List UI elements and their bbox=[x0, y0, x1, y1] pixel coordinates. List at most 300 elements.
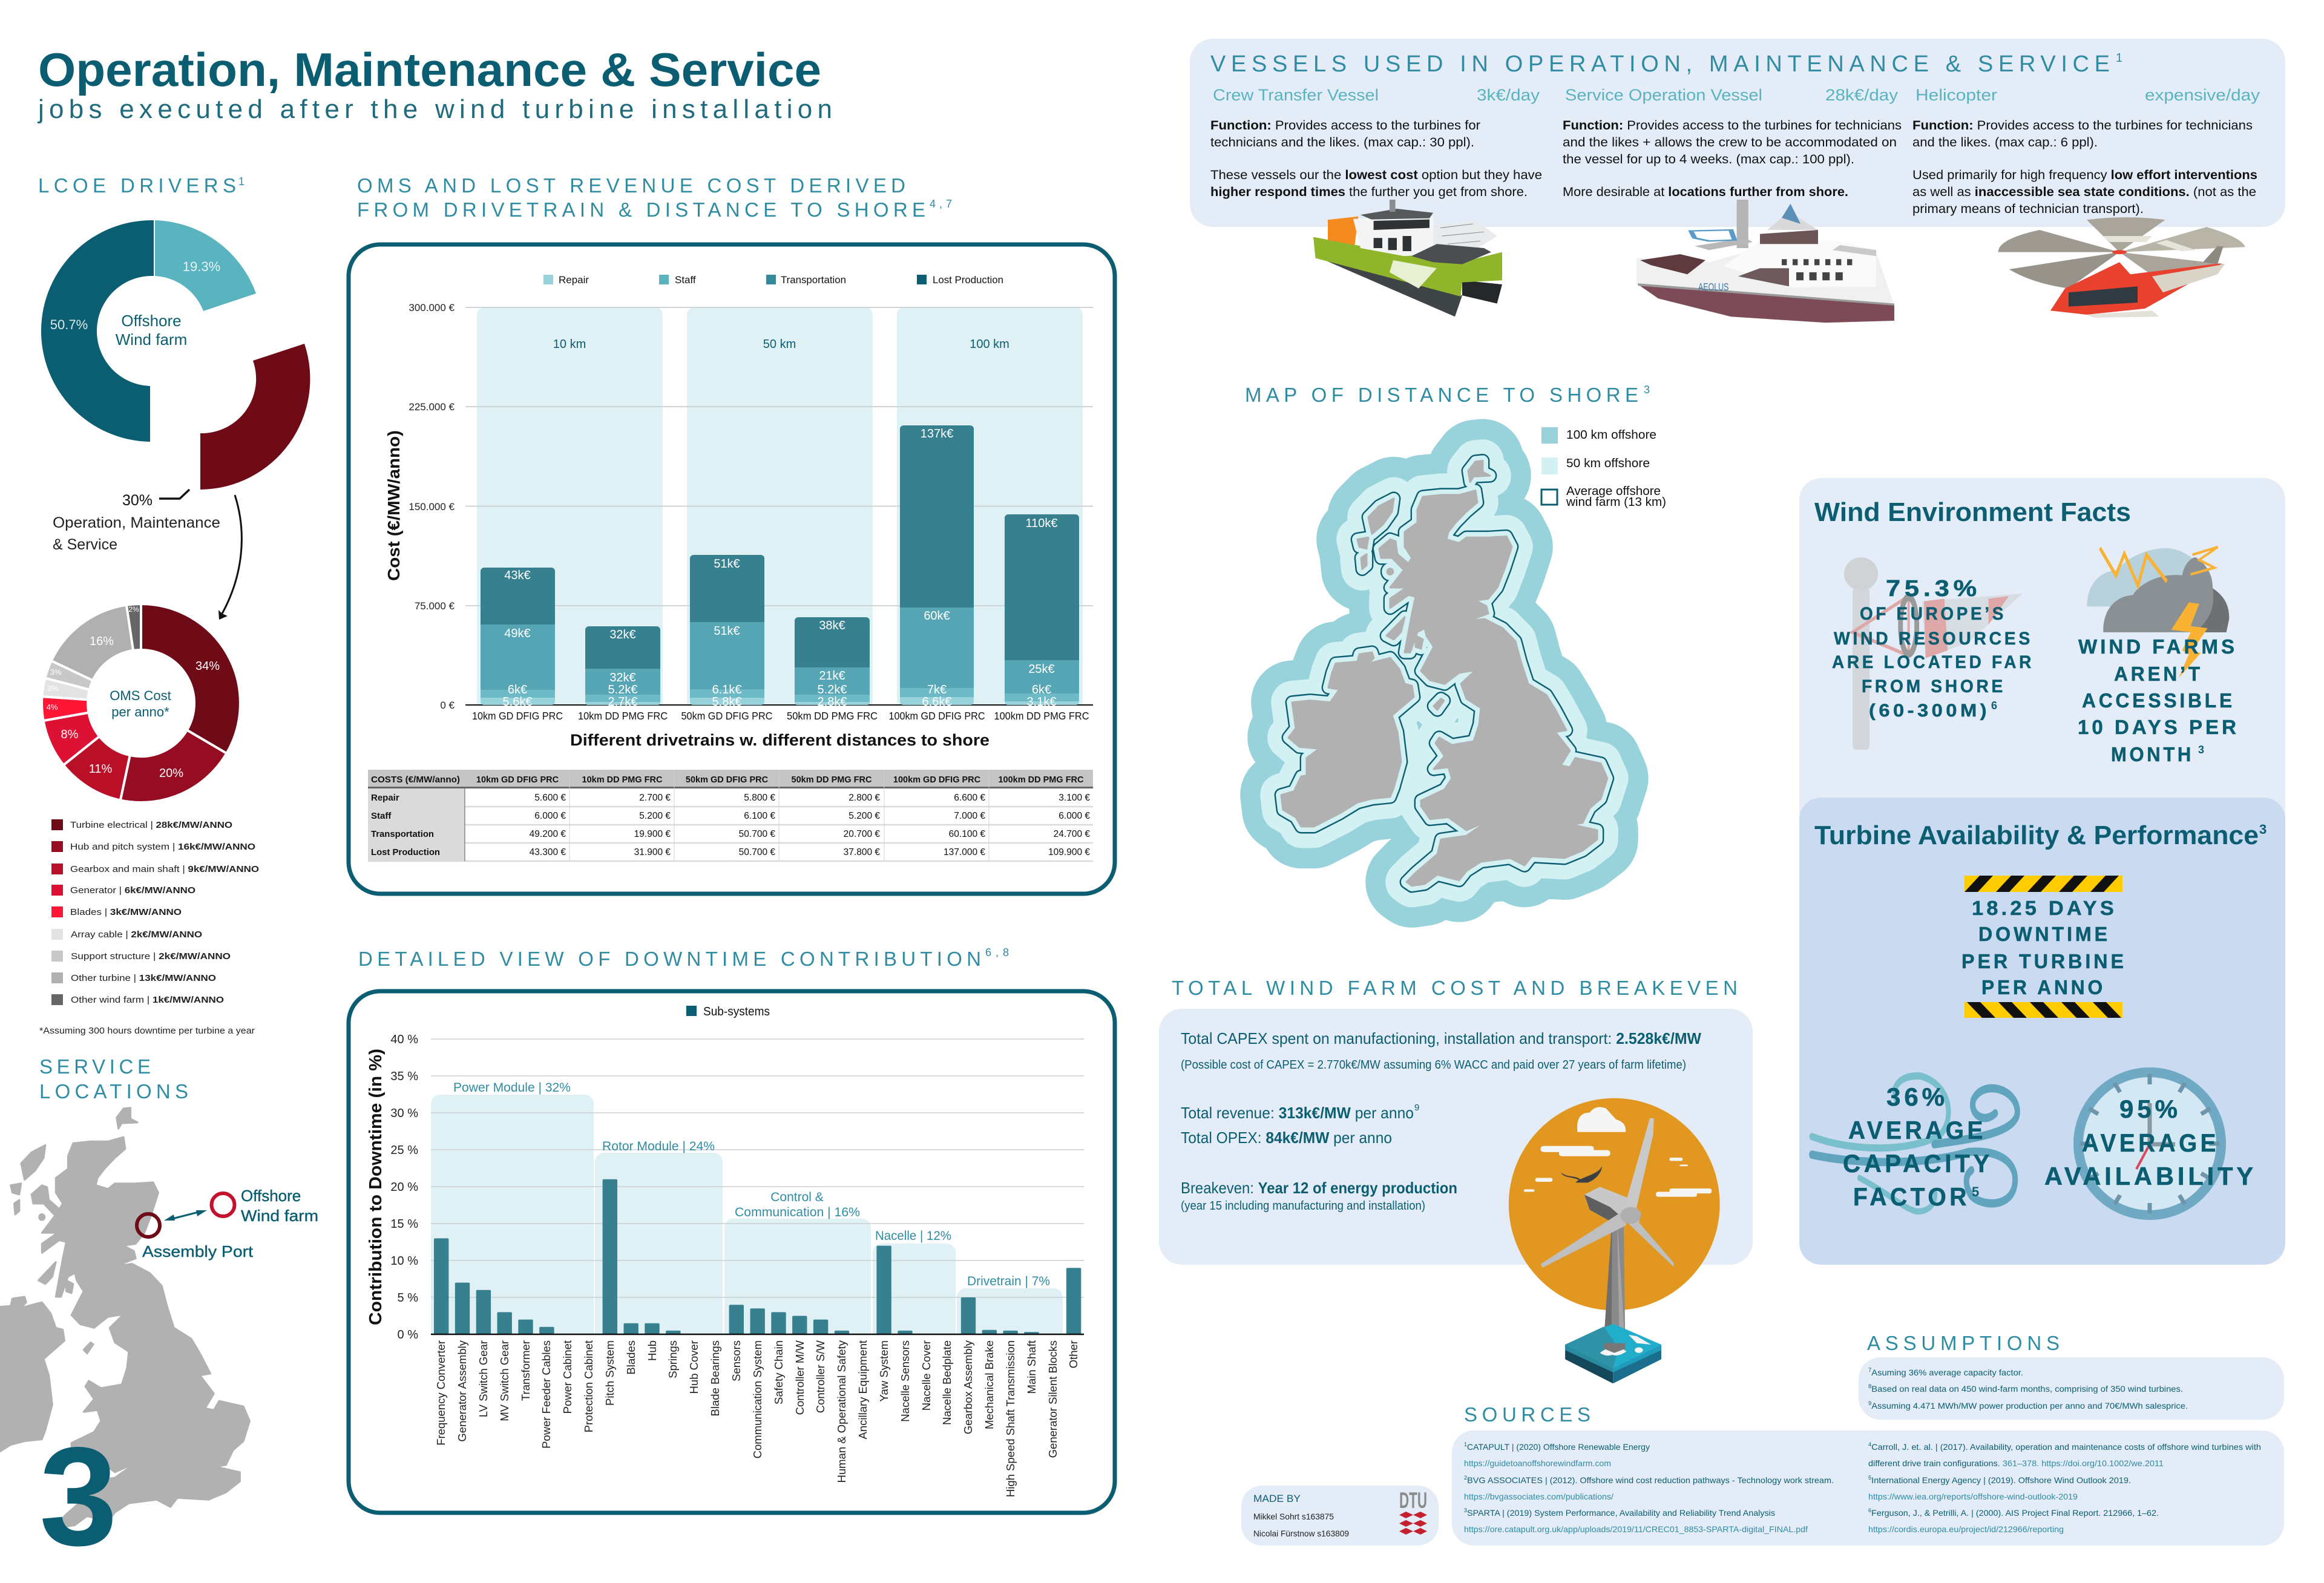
bar: 50km DD PMG FRC: 21k€ bbox=[819, 669, 845, 683]
fact: inaccessible days: WIND FARMS bbox=[2078, 635, 2237, 658]
heading: map of distance to shore: 3 bbox=[1644, 384, 1650, 396]
heading: LCOE drivers: LCOE DRIVERS bbox=[38, 174, 236, 197]
subtitle: jobs executed after the wind turbine installation bbox=[37, 94, 832, 124]
column: helicopter: Function: Provides access to the turbines for technicians bbox=[1912, 119, 2253, 133]
heading: LCOE drivers: 1 bbox=[238, 175, 245, 188]
bar: 50km GD DFIG PRC: 6.1k€ bbox=[712, 683, 741, 696]
x axis labels bbox=[472, 710, 1089, 722]
legend: OMS cost: Blades | 3k€/MW/ANNO bbox=[70, 907, 182, 917]
panel: sources: Carroll, J. et. al. | (2017). Availability, operation and maintenance costs of offshore wind turbines with bbox=[1871, 1442, 2261, 1452]
column: crew transfer vessel bbox=[1210, 86, 1542, 199]
table: costs: 19.900 € bbox=[634, 829, 671, 839]
module labels: Drivetrain | 7% bbox=[967, 1274, 1050, 1288]
bar: 100km DD PMG FRC: 25k€ bbox=[1028, 663, 1055, 676]
x axis labels: Blades bbox=[625, 1340, 637, 1375]
fact: capacity factor: FACTOR bbox=[1853, 1182, 1970, 1211]
fact: availability bbox=[2044, 1095, 2257, 1190]
heading: vessels: 1 bbox=[2116, 51, 2122, 65]
x axis labels: Nacelle Sensors bbox=[899, 1340, 911, 1422]
x axis labels: 100km GD DFIG PRC bbox=[888, 710, 985, 722]
column: service operation vessel: 28k€/day bbox=[1825, 86, 1899, 104]
panel: sources: 6 bbox=[1868, 1507, 1871, 1513]
panel: sources: https://www.iea.org/reports/offshore-wind-outlook-2019 bbox=[1868, 1492, 2078, 1501]
module labels: Rotor Module | 24% bbox=[602, 1139, 715, 1153]
heading: total wind farm cost: TOTAL WIND FARM COST AND BREAKEVEN bbox=[1172, 977, 1738, 999]
heading: service locations bbox=[39, 1055, 188, 1103]
icon: service operation vessel bbox=[1636, 200, 1894, 323]
legend: distance to shore: 50 km offshore bbox=[1566, 457, 1650, 470]
x axis labels: Nacelle Bedplate bbox=[940, 1340, 953, 1425]
y axis labels: 25 % bbox=[390, 1144, 418, 1157]
column: helicopter bbox=[1912, 86, 2260, 216]
legend: cost types: Lost Production bbox=[933, 274, 1003, 286]
y axis gridlines bbox=[465, 307, 1093, 606]
table: costs: 43.300 € bbox=[530, 847, 566, 857]
icon: service operation vessel: AEOLUS bbox=[1698, 281, 1728, 293]
x axis labels: Communication System bbox=[751, 1340, 764, 1458]
column: helicopter: expensive/day bbox=[2145, 86, 2260, 104]
column: service operation vessel: the vessel for up to 4 weeks. (max cap.: 100 ppl). bbox=[1563, 152, 1854, 166]
y axis labels: 75.000 € bbox=[415, 600, 455, 612]
hazard stripe: bottom bbox=[1965, 1002, 2122, 1018]
panel: sources: BVG ASSOCIATES | (2012). Offshore wind cost reduction pathways - Technology work stream. bbox=[1467, 1475, 1834, 1485]
chart: OMS cost donut: 34% bbox=[195, 660, 220, 673]
table: costs: Transportation bbox=[371, 829, 434, 839]
panel: wind environment facts bbox=[1799, 478, 2285, 841]
distance labels: 10 km bbox=[553, 338, 586, 351]
heading: OMS and lost revenue: OMS AND LOST REVENUE COST DERIVED bbox=[357, 174, 905, 197]
panel: sources: International Energy Agency | (2019). Offshore Wind Outlook 2019. bbox=[1871, 1475, 2131, 1485]
x axis labels: MV Switch Gear bbox=[498, 1340, 511, 1421]
table: costs: 50.700 € bbox=[739, 829, 775, 839]
gridlines bbox=[431, 1039, 1084, 1297]
table: costs: 137.000 € bbox=[944, 847, 985, 857]
heading: OMS and lost revenue bbox=[357, 174, 952, 221]
bar: 100km GD DFIG PRC: 7k€ bbox=[927, 683, 947, 696]
chart: OMS cost donut: 3% bbox=[50, 667, 62, 677]
fact: capacity factor: CAPACITY bbox=[1843, 1149, 1993, 1178]
callout: 30 percent OMS bbox=[53, 490, 220, 553]
heading: assumptions: ASSUMPTIONS bbox=[1867, 1332, 2060, 1354]
column: service operation vessel bbox=[1563, 86, 1902, 199]
chart: LCOE donut: 50.7% bbox=[50, 317, 88, 332]
x axis labels: LV Switch Gear bbox=[477, 1340, 490, 1417]
x axis labels: Human & Operational Safety bbox=[835, 1340, 848, 1483]
chart: OMS cost donut: 3% bbox=[47, 684, 59, 693]
column: crew transfer vessel: These vessels our the lowest cost option but they have bbox=[1210, 168, 1542, 182]
chart: OMS cost donut: 2% bbox=[128, 605, 139, 614]
distance labels bbox=[553, 338, 1009, 351]
bar: 10km DD PMG FRC: 32k€ bbox=[609, 628, 636, 641]
legend: distance to shore: 100 km offshore bbox=[1566, 428, 1656, 442]
x axis title: Different drivetrains w. different distances to shore bbox=[570, 731, 990, 749]
bar: 50km GD DFIG PRC bbox=[690, 555, 764, 709]
x axis labels: Generator Assembly bbox=[456, 1340, 468, 1442]
heading: turbine availability: Turbine Availability & Performance bbox=[1814, 821, 2259, 850]
panel: made by: Nicolai Fürstnow s163809 bbox=[1253, 1529, 1349, 1538]
panel: total cost: (year 15 including manufacturing and installation) bbox=[1181, 1199, 1425, 1213]
x axis labels: Other bbox=[1067, 1340, 1080, 1368]
y axis labels: 30 % bbox=[390, 1107, 418, 1120]
panel: sources: 3 bbox=[1464, 1507, 1467, 1513]
x axis labels: Safety Chain bbox=[772, 1340, 785, 1404]
column: crew transfer vessel: higher respond times the further you get from shore. bbox=[1210, 185, 1528, 199]
bar: 10km GD DFIG PRC bbox=[481, 568, 555, 709]
table: costs: 2.700 € bbox=[639, 793, 671, 803]
legend: cost types bbox=[543, 274, 1003, 286]
chart: OMS cost donut: OMS Cost bbox=[110, 688, 171, 703]
hazard stripe: top bbox=[1965, 876, 2122, 892]
x axis labels: Generator Silent Blocks bbox=[1046, 1340, 1059, 1458]
heading: service locations: LOCATIONS bbox=[39, 1080, 188, 1103]
column: service operation vessel: Function: Provides access to the turbines for technicians bbox=[1563, 119, 1902, 133]
legend: OMS cost: Turbine electrical | 28k€/MW/ANNO bbox=[70, 820, 232, 830]
panel: made by: MADE BY bbox=[1253, 1493, 1301, 1504]
x axis labels: Main Shaft bbox=[1025, 1340, 1038, 1394]
x axis labels: Pitch System bbox=[603, 1340, 616, 1406]
icon: helicopter bbox=[1998, 217, 2245, 318]
legend: OMS cost: Support structure | 2k€/MW/ANNO bbox=[71, 951, 231, 962]
fact: downtime days: PER ANNO bbox=[1981, 976, 2106, 998]
fact: capacity factor: 5 bbox=[1972, 1184, 1979, 1199]
bar: 50km DD PMG FRC: 38k€ bbox=[819, 619, 845, 632]
heading: downtime contribution: DETAILED VIEW OF DOWNTIME CONTRIBUTION bbox=[358, 948, 981, 970]
table: costs: 50km GD DFIG PRC bbox=[686, 775, 769, 785]
map: service locations: Offshore bbox=[241, 1187, 301, 1205]
panel: assumptions: 8 bbox=[1868, 1383, 1871, 1389]
y axis labels: 0 % bbox=[398, 1328, 418, 1342]
fact: 75.3 percent: WIND RESOURCES bbox=[1834, 629, 2033, 649]
table: costs: 50km DD PMG FRC bbox=[792, 775, 872, 785]
column: helicopter: and the likes. (max cap.: 6 ppl). bbox=[1912, 136, 2098, 149]
fact: 75.3 percent: FROM SHORE bbox=[1862, 677, 2006, 696]
y axis title: Cost (€/MW/anno) bbox=[384, 430, 403, 581]
panel: made by bbox=[1241, 1486, 1439, 1545]
legend: distance to shore bbox=[1541, 427, 1666, 509]
x axis labels: Hub bbox=[646, 1340, 658, 1361]
column: helicopter: primary means of technician transport). bbox=[1912, 202, 2144, 216]
y axis labels bbox=[390, 1033, 418, 1342]
heading: service locations: SERVICE bbox=[39, 1055, 151, 1078]
chart: OMS cost donut: 11% bbox=[89, 762, 112, 776]
table: costs: 37.800 € bbox=[844, 847, 880, 857]
icon: crew transfer vessel bbox=[1313, 200, 1502, 316]
legend: distance to shore: wind farm (13 km) bbox=[1566, 496, 1666, 509]
column: helicopter: Used primarily for high frequency low effort interventions bbox=[1912, 168, 2257, 182]
x axis labels: Controller S/W bbox=[814, 1340, 827, 1413]
table: costs: 6.000 € bbox=[1059, 811, 1090, 821]
panel: downtime bar chart bbox=[349, 991, 1115, 1513]
column: helicopter: Helicopter bbox=[1915, 86, 1997, 104]
heading: downtime contribution: 6,8 bbox=[985, 946, 1009, 959]
panel: OMS stacked bar chart bbox=[349, 244, 1115, 894]
legend: sub-systems: Sub-systems bbox=[703, 1005, 770, 1018]
panel: sources: 5 bbox=[1868, 1475, 1871, 1481]
panel: assumptions: Assuming 4.471 MWh/MW power production per anno and 70€/MWh salesprice. bbox=[1871, 1401, 2188, 1411]
arrow to OMS donut bbox=[218, 495, 241, 620]
heading: OMS and lost revenue: FROM DRIVETRAIN & DISTANCE TO SHORE bbox=[357, 198, 925, 221]
bar: 100km GD DFIG PRC: 137k€ bbox=[921, 427, 953, 441]
panel: total cost: 9 bbox=[1414, 1103, 1419, 1113]
x axis labels: 50km DD PMG FRC bbox=[787, 710, 878, 722]
distance bands bbox=[477, 307, 1083, 705]
panel: total cost: Total OPEX: 84k€/MW per anno bbox=[1181, 1129, 1392, 1147]
page number: 3 bbox=[39, 1418, 117, 1575]
fact: downtime days: 18.25 DAYS bbox=[1972, 897, 2117, 919]
panel: sources: 1 bbox=[1464, 1441, 1467, 1447]
table: costs: 6.000 € bbox=[534, 811, 566, 821]
chart: OMS cost donut: 16% bbox=[90, 635, 114, 648]
table: costs: 5.600 € bbox=[534, 793, 566, 803]
table: costs: COSTS (€/MW/anno) bbox=[371, 775, 460, 785]
panel: sources: CATAPULT | (2020) Offshore Renewable Energy bbox=[1467, 1442, 1650, 1452]
x axis labels: Power Feeder Cables bbox=[540, 1340, 553, 1449]
bar: 50km DD PMG FRC: 5.2k€ bbox=[818, 683, 847, 696]
fact: availability: AVAILABILITY bbox=[2044, 1162, 2257, 1190]
y axis labels: 20 % bbox=[390, 1181, 418, 1194]
table: costs: 50.700 € bbox=[739, 847, 775, 857]
column: crew transfer vessel: technicians and the likes. (max cap.: 30 ppl). bbox=[1210, 136, 1474, 149]
distance labels: 50 km bbox=[763, 338, 796, 351]
module labels bbox=[453, 1081, 1050, 1288]
fact: downtime days: PER TURBINE bbox=[1961, 950, 2127, 972]
table: costs: Staff bbox=[371, 811, 392, 821]
y axis labels: 35 % bbox=[390, 1070, 418, 1083]
fact: downtime days: DOWNTIME bbox=[1978, 923, 2110, 945]
icon: storm cloud bbox=[2087, 547, 2229, 678]
panel: total cost: Total CAPEX spent on manufactioning, installation and transport: 2.528k€/MW bbox=[1181, 1029, 1701, 1047]
table: costs: 10km DD PMG FRC bbox=[582, 775, 663, 785]
panel: assumptions: 9 bbox=[1868, 1400, 1871, 1406]
icon: wind turbine bbox=[1509, 1098, 1720, 1383]
bar: 100km DD PMG FRC: 110k€ bbox=[1025, 517, 1058, 530]
map: distance to shore bbox=[1281, 461, 1607, 886]
logo: DTU: DTU bbox=[1399, 1488, 1427, 1513]
bar: 10km GD DFIG PRC: 43k€ bbox=[504, 569, 531, 582]
bar: 100km DD PMG FRC: 6k€ bbox=[1032, 683, 1051, 696]
distance labels: 100 km bbox=[970, 338, 1009, 351]
fact: 75.3 percent: 75.3% bbox=[1886, 576, 1981, 601]
x axis labels: Nacelle Cover bbox=[920, 1340, 933, 1411]
panel: sources: Ferguson, J., & Petrilli, A. | (2000). AIS Project Final Report. 212966, 1–62. bbox=[1871, 1508, 2159, 1518]
table: costs: 6.600 € bbox=[954, 793, 985, 803]
table: costs: 20.700 € bbox=[844, 829, 880, 839]
y axis labels: 5 % bbox=[398, 1291, 418, 1305]
x axis labels: Mechanical Brake bbox=[983, 1340, 996, 1429]
icon: wind swirl bbox=[1812, 1076, 2017, 1211]
y axis labels: 10 % bbox=[390, 1254, 418, 1268]
legend: OMS cost: Other wind farm | 1k€/MW/ANNO bbox=[71, 995, 224, 1005]
bar: 100km DD PMG FRC bbox=[1005, 514, 1079, 709]
bar: 50km DD PMG FRC bbox=[795, 617, 870, 709]
y axis labels: 15 % bbox=[390, 1218, 418, 1231]
panel: total cost bbox=[1159, 1009, 1753, 1265]
callout: 30 percent OMS: 30% bbox=[122, 492, 153, 509]
panel: sources: SPARTA | (2019) System Performance, Availability and Reliability Trend Analysis bbox=[1467, 1508, 1775, 1518]
column: helicopter: as well as inaccessible sea state conditions. (not as the bbox=[1912, 185, 2256, 199]
module labels: Nacelle | 12% bbox=[875, 1229, 951, 1243]
legend: cost types: Repair bbox=[559, 274, 589, 286]
panel: sources: https://guidetoanoffshorewindfarm.com bbox=[1464, 1458, 1611, 1468]
x axis labels: Gearbox Assembly bbox=[962, 1340, 974, 1434]
panel: assumptions: 7 bbox=[1868, 1367, 1871, 1373]
module labels: Communication | 16% bbox=[735, 1205, 860, 1219]
table: costs: 100km GD DFIG PRC bbox=[893, 775, 981, 785]
table: costs: 3.100 € bbox=[1059, 793, 1090, 803]
fact: availability: AVERAGE bbox=[2082, 1129, 2219, 1157]
heading: wind environment facts: Wind Environment Facts bbox=[1814, 497, 2131, 527]
panel: sources: https://bvgassociates.com/publications/ bbox=[1464, 1492, 1613, 1501]
x axis labels: High Speed Shaft Transmission bbox=[1004, 1340, 1017, 1497]
legend: OMS cost: Generator | 6k€/MW/ANNO bbox=[70, 885, 195, 896]
panel: sources: 4 bbox=[1868, 1441, 1871, 1447]
heading: turbine availability: 3 bbox=[2259, 822, 2267, 837]
x axis labels bbox=[435, 1340, 1080, 1497]
bar: 100km GD DFIG PRC: 6.6k€ bbox=[922, 695, 951, 709]
chart: LCOE donut: Offshore bbox=[121, 312, 182, 330]
chart: LCOE donut bbox=[41, 220, 310, 490]
map: service locations: Assembly Port bbox=[142, 1242, 254, 1260]
panel: sources bbox=[1452, 1431, 2284, 1545]
legend: OMS cost: Other turbine | 13k€/MW/ANNO bbox=[71, 973, 216, 983]
legend: OMS cost: Gearbox and main shaft | 9k€/MW/ANNO bbox=[70, 864, 259, 874]
panel: total cost: (Possible cost of CAPEX = 2.770k€/MW assuming 6% WACC and paid over 27 years of farm lifetime) bbox=[1181, 1058, 1686, 1072]
fact: capacity factor: 36% bbox=[1886, 1083, 1948, 1111]
table: costs: 5.200 € bbox=[849, 811, 880, 821]
x axis labels: Frequency Converter bbox=[435, 1340, 447, 1446]
column: crew transfer vessel: 3k€/day bbox=[1477, 86, 1540, 104]
panel: total cost: Total revenue: 313k€/MW per anno bbox=[1181, 1104, 1414, 1122]
legend: OMS cost: Array cable | 2k€/MW/ANNO bbox=[71, 929, 202, 940]
map: service locations: Wind farm bbox=[241, 1207, 318, 1225]
table: costs: 49.200 € bbox=[530, 829, 566, 839]
panel: sources: https://ore.catapult.org.uk/app/uploads/2019/11/CREC01_8853-SPARTA-digital_FINAL.pdf bbox=[1464, 1524, 1808, 1534]
table: costs: 24.700 € bbox=[1054, 829, 1090, 839]
panel: sources: 2 bbox=[1464, 1475, 1467, 1481]
y axis labels: 0 € bbox=[440, 700, 455, 711]
x axis labels: 50km GD DFIG PRC bbox=[681, 710, 772, 722]
legend: OMS cost: Hub and pitch system | 16k€/MW/ANNO bbox=[70, 842, 255, 852]
bar: 10km DD PMG FRC: 2.7k€ bbox=[608, 695, 637, 709]
panel: sources: different drive train configurations. 361–378. https://doi.org/10.1002/we.2011 bbox=[1868, 1458, 2164, 1468]
table: costs: Lost Production bbox=[371, 847, 440, 857]
panel: made by: Mikkel Sohrt s163875 bbox=[1253, 1512, 1334, 1521]
legend: distance to shore: Average offshore bbox=[1566, 485, 1661, 498]
table: costs: Repair bbox=[371, 793, 399, 803]
table: costs: 109.900 € bbox=[1048, 847, 1090, 857]
column: service operation vessel: More desirable at locations further from shore. bbox=[1563, 185, 1848, 199]
table: costs bbox=[368, 770, 1093, 861]
module backgrounds bbox=[431, 1095, 1063, 1334]
fact: inaccessible days: ACCESSIBLE bbox=[2082, 689, 2235, 712]
x axis labels: Power Cabinet bbox=[561, 1340, 574, 1414]
x axis labels: Yaw System bbox=[878, 1340, 890, 1401]
y axis labels: 40 % bbox=[390, 1033, 418, 1046]
heading: map of distance to shore: MAP OF DISTANCE TO SHORE bbox=[1245, 384, 1638, 406]
chart: OMS cost donut bbox=[42, 604, 240, 802]
y axis labels bbox=[409, 302, 455, 711]
callout: 30 percent OMS: & Service bbox=[53, 536, 117, 553]
chart: LCOE donut: 19.3% bbox=[183, 259, 220, 274]
table: costs: 100km DD PMG FRC bbox=[998, 775, 1084, 785]
fact: 75.3 percent bbox=[1832, 576, 2034, 721]
chart: OMS cost donut: 4% bbox=[47, 703, 58, 712]
table: costs: 5.800 € bbox=[744, 793, 775, 803]
column: service operation vessel: and the likes + allows the crew to be accommodated on bbox=[1563, 136, 1897, 149]
fact: capacity factor bbox=[1843, 1083, 1993, 1211]
y axis labels: 150.000 € bbox=[409, 501, 455, 513]
fact: inaccessible days: MONTH bbox=[2111, 743, 2194, 765]
table: costs: 6.100 € bbox=[744, 811, 775, 821]
icon: windsock bbox=[1844, 557, 2023, 750]
panel: total cost: Breakeven: Year 12 of energy production bbox=[1181, 1179, 1457, 1197]
fact: 75.3 percent: ARE LOCATED FAR bbox=[1832, 652, 2034, 672]
table: costs: 7.000 € bbox=[954, 811, 985, 821]
table: costs: 31.900 € bbox=[634, 847, 671, 857]
column: crew transfer vessel: Function: Provides access to the turbines for bbox=[1210, 119, 1480, 133]
bar: 100km GD DFIG PRC: 60k€ bbox=[924, 609, 950, 623]
module labels: Power Module | 32% bbox=[453, 1081, 571, 1095]
fact: 75.3 percent: (60-300M) bbox=[1869, 701, 1990, 721]
logo: DTU bbox=[1399, 1488, 1427, 1535]
y axis labels: 300.000 € bbox=[409, 302, 455, 313]
x axis labels: Controller M/W bbox=[793, 1340, 806, 1415]
bar: 50km GD DFIG PRC: 51k€ bbox=[714, 624, 740, 638]
icon: clock bbox=[2078, 1072, 2221, 1215]
fact: inaccessible days bbox=[2078, 635, 2239, 765]
bar: 10km DD PMG FRC: 5.2k€ bbox=[608, 683, 637, 696]
fact: inaccessible days: AREN’T bbox=[2114, 663, 2203, 685]
panel: sources: https://cordis.europa.eu/project/id/212966/reporting bbox=[1868, 1524, 2064, 1534]
bar: 10km GD DFIG PRC: 6k€ bbox=[508, 683, 527, 696]
y axis title: Contribution to Downtime (in %) bbox=[366, 1049, 386, 1325]
callout: 30 percent OMS: Operation, Maintenance bbox=[53, 514, 220, 531]
bar: 10km DD PMG FRC bbox=[585, 626, 660, 709]
fact: capacity factor: AVERAGE bbox=[1848, 1116, 1986, 1144]
chart: OMS cost donut: 8% bbox=[61, 728, 79, 741]
module labels: Control & bbox=[770, 1190, 824, 1204]
panel: vessels bbox=[1190, 39, 2285, 227]
panel: assumptions: Based on real data on 450 wind-farm months, comprising of 350 wind turbines. bbox=[1871, 1384, 2183, 1394]
x axis labels: Hub Cover bbox=[688, 1340, 700, 1394]
heading: vessels: VESSELS USED IN OPERATION, MAINTENANCE & SERVICE bbox=[1210, 51, 2110, 77]
chart: OMS cost donut: per anno* bbox=[111, 704, 169, 719]
heading: OMS and lost revenue: 4,7 bbox=[930, 198, 952, 210]
y axis labels: 225.000 € bbox=[409, 401, 455, 413]
x axis labels: Springs bbox=[666, 1340, 679, 1378]
x axis labels: Sensors bbox=[730, 1340, 743, 1381]
column: crew transfer vessel: Crew Transfer Vessel bbox=[1213, 86, 1379, 104]
table: costs: 2.800 € bbox=[849, 793, 880, 803]
title: Operation, Maintenance & Service bbox=[38, 43, 821, 96]
panel: turbine availability bbox=[1799, 798, 2285, 1265]
x axis labels: Transformer bbox=[519, 1340, 532, 1401]
fact: availability: 95% bbox=[2119, 1095, 2181, 1123]
fact: downtime days bbox=[1961, 897, 2127, 998]
legend: cost types: Transportation bbox=[781, 274, 846, 286]
x axis labels: Blade Bearings bbox=[709, 1340, 721, 1416]
bar: 50km GD DFIG PRC: 5.8k€ bbox=[712, 695, 741, 709]
fact: inaccessible days: 3 bbox=[2198, 744, 2204, 756]
bars: sub-systems bbox=[434, 1179, 1081, 1334]
bar: 10km DD PMG FRC: 32k€ bbox=[609, 671, 636, 684]
bar: 10km GD DFIG PRC: 49k€ bbox=[504, 627, 531, 640]
chart: OMS cost donut: 20% bbox=[159, 767, 183, 780]
legend: OMS cost bbox=[51, 819, 259, 1005]
panel: assumptions: Asuming 36% average capacity factor. bbox=[1871, 1368, 2023, 1377]
fact: inaccessible days: 10 DAYS PER bbox=[2078, 716, 2239, 738]
bar: 50km DD PMG FRC: 2.8k€ bbox=[818, 695, 847, 709]
